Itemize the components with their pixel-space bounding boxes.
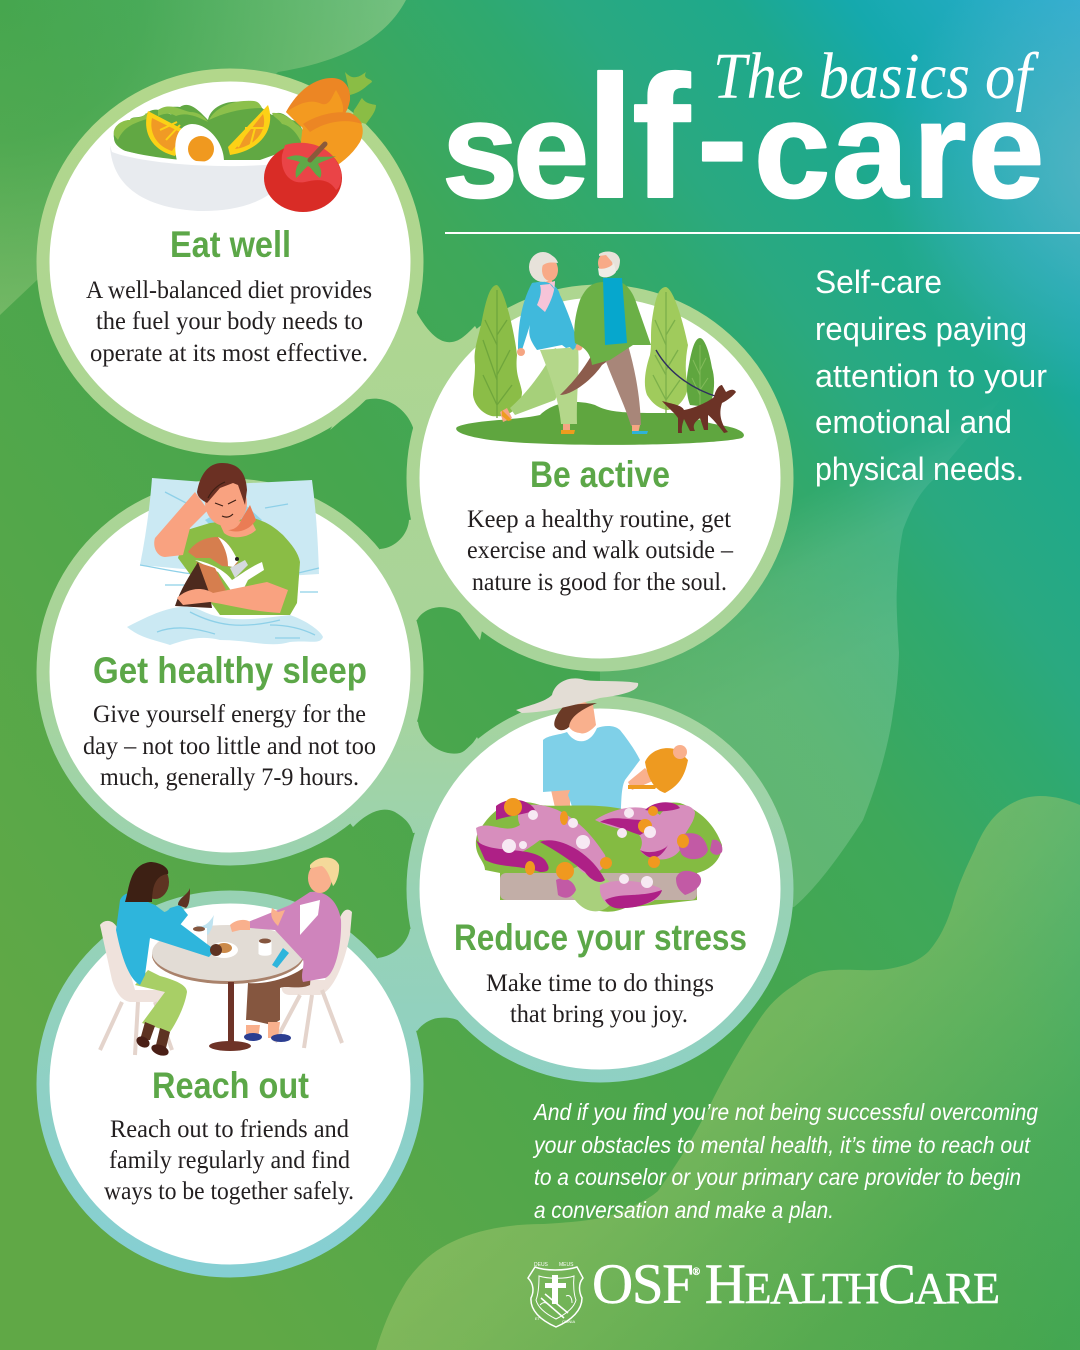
connector web between circles [300,300,520,1031]
intro text: requires paying [815,311,1027,347]
heading: reach out: Reach out [152,1065,309,1106]
text: be active [467,506,733,596]
text: logo wordmark: OSF [592,1253,694,1316]
text: eat well: operate at its most effective. [90,340,368,367]
title: self-care: lf [586,39,691,234]
icon: couple walking dog [456,252,744,445]
title: self-care: se [442,74,589,227]
text: be active: Keep a healthy routine, get [467,506,731,533]
icon: crest: ET [535,1316,541,1321]
text: sleep [83,701,376,791]
background glow top right [800,0,1080,420]
panel: reduce your stress [413,678,787,1076]
circle: eat well [43,75,417,449]
text: reach out: Reach out to friends and [110,1116,349,1143]
intro text: attention to your [815,358,1047,394]
intro text [815,264,1047,487]
text: be active: nature is good for the soul. [472,569,727,596]
panel: get healthy sleep [43,463,417,859]
text: eat well: the fuel your body needs to [96,308,363,335]
logo: OSF HealthCare [528,1253,1000,1327]
text: logo wordmark: H [705,1253,746,1316]
closing note [532,1099,1038,1223]
text: sleep: much, generally 7-9 hours. [100,764,359,791]
heading: get healthy sleep: Get healthy sleep [93,650,367,691]
circle: reach out [43,897,417,1271]
panel: eat well [43,72,417,449]
text: logo wordmark: ® [693,1267,701,1278]
text: eat well: A well-balanced diet provides [86,277,372,304]
title [442,39,1044,234]
circle: be active [413,291,787,665]
closing note: a conversation and make a plan. [534,1197,834,1223]
title divider [445,232,1080,234]
icon: friends at table [100,858,352,1058]
text: reach out: family regularly and find [109,1147,350,1174]
title: self-care: - [697,54,748,224]
closing note: to a counselor or your primary care provider to begin [534,1164,1021,1190]
heading: eat well: Eat well [170,224,291,265]
blob: middle right [600,400,1000,907]
icon: crest: DEUS [534,1262,549,1268]
intro text: emotional and [815,404,1012,440]
closing note: And if you find you’re not being successful overcoming [532,1099,1038,1125]
icon: crest: OMNIA [562,1319,575,1324]
text: reach out [104,1116,354,1205]
text: be active: exercise and walk outside – [467,537,733,564]
text: sleep: Give yourself energy for the [93,701,366,728]
text: reach out: ways to be together safely. [104,1178,354,1205]
panel: reach out [43,858,417,1271]
heading: be active: Be active [530,454,670,495]
text: reduce stress: that bring you joy. [510,1001,688,1028]
panel: be active [413,252,787,665]
icon: woman gardening [476,678,722,912]
circle: reduce stress [413,702,787,1076]
closing note: your obstacles to mental health, it’s time to reach out [532,1132,1031,1158]
text: eat well [86,277,372,367]
text: logo wordmark: EALTHCARE [745,1253,1000,1316]
text: reduce stress: Make time to do things [486,970,714,997]
blob: top left [0,0,406,315]
circle: sleep [43,485,417,859]
blob: lower right [376,796,1080,1350]
text: sleep: day – not too little and not too [83,733,376,760]
icon: crest [528,1262,583,1327]
intro text: physical needs. [815,451,1024,487]
title: self-care: care [754,74,1044,227]
icon: man sleeping with dog [127,463,323,645]
intro text: Self-care [815,264,942,300]
heading: reduce your stress: Reduce your stress [454,917,747,958]
text: reduce stress [486,970,714,1028]
icon: salad bowl with vegetables [110,72,376,212]
icon: crest: MEUS [559,1262,574,1268]
title: the basics of: The basics of [713,40,1039,113]
